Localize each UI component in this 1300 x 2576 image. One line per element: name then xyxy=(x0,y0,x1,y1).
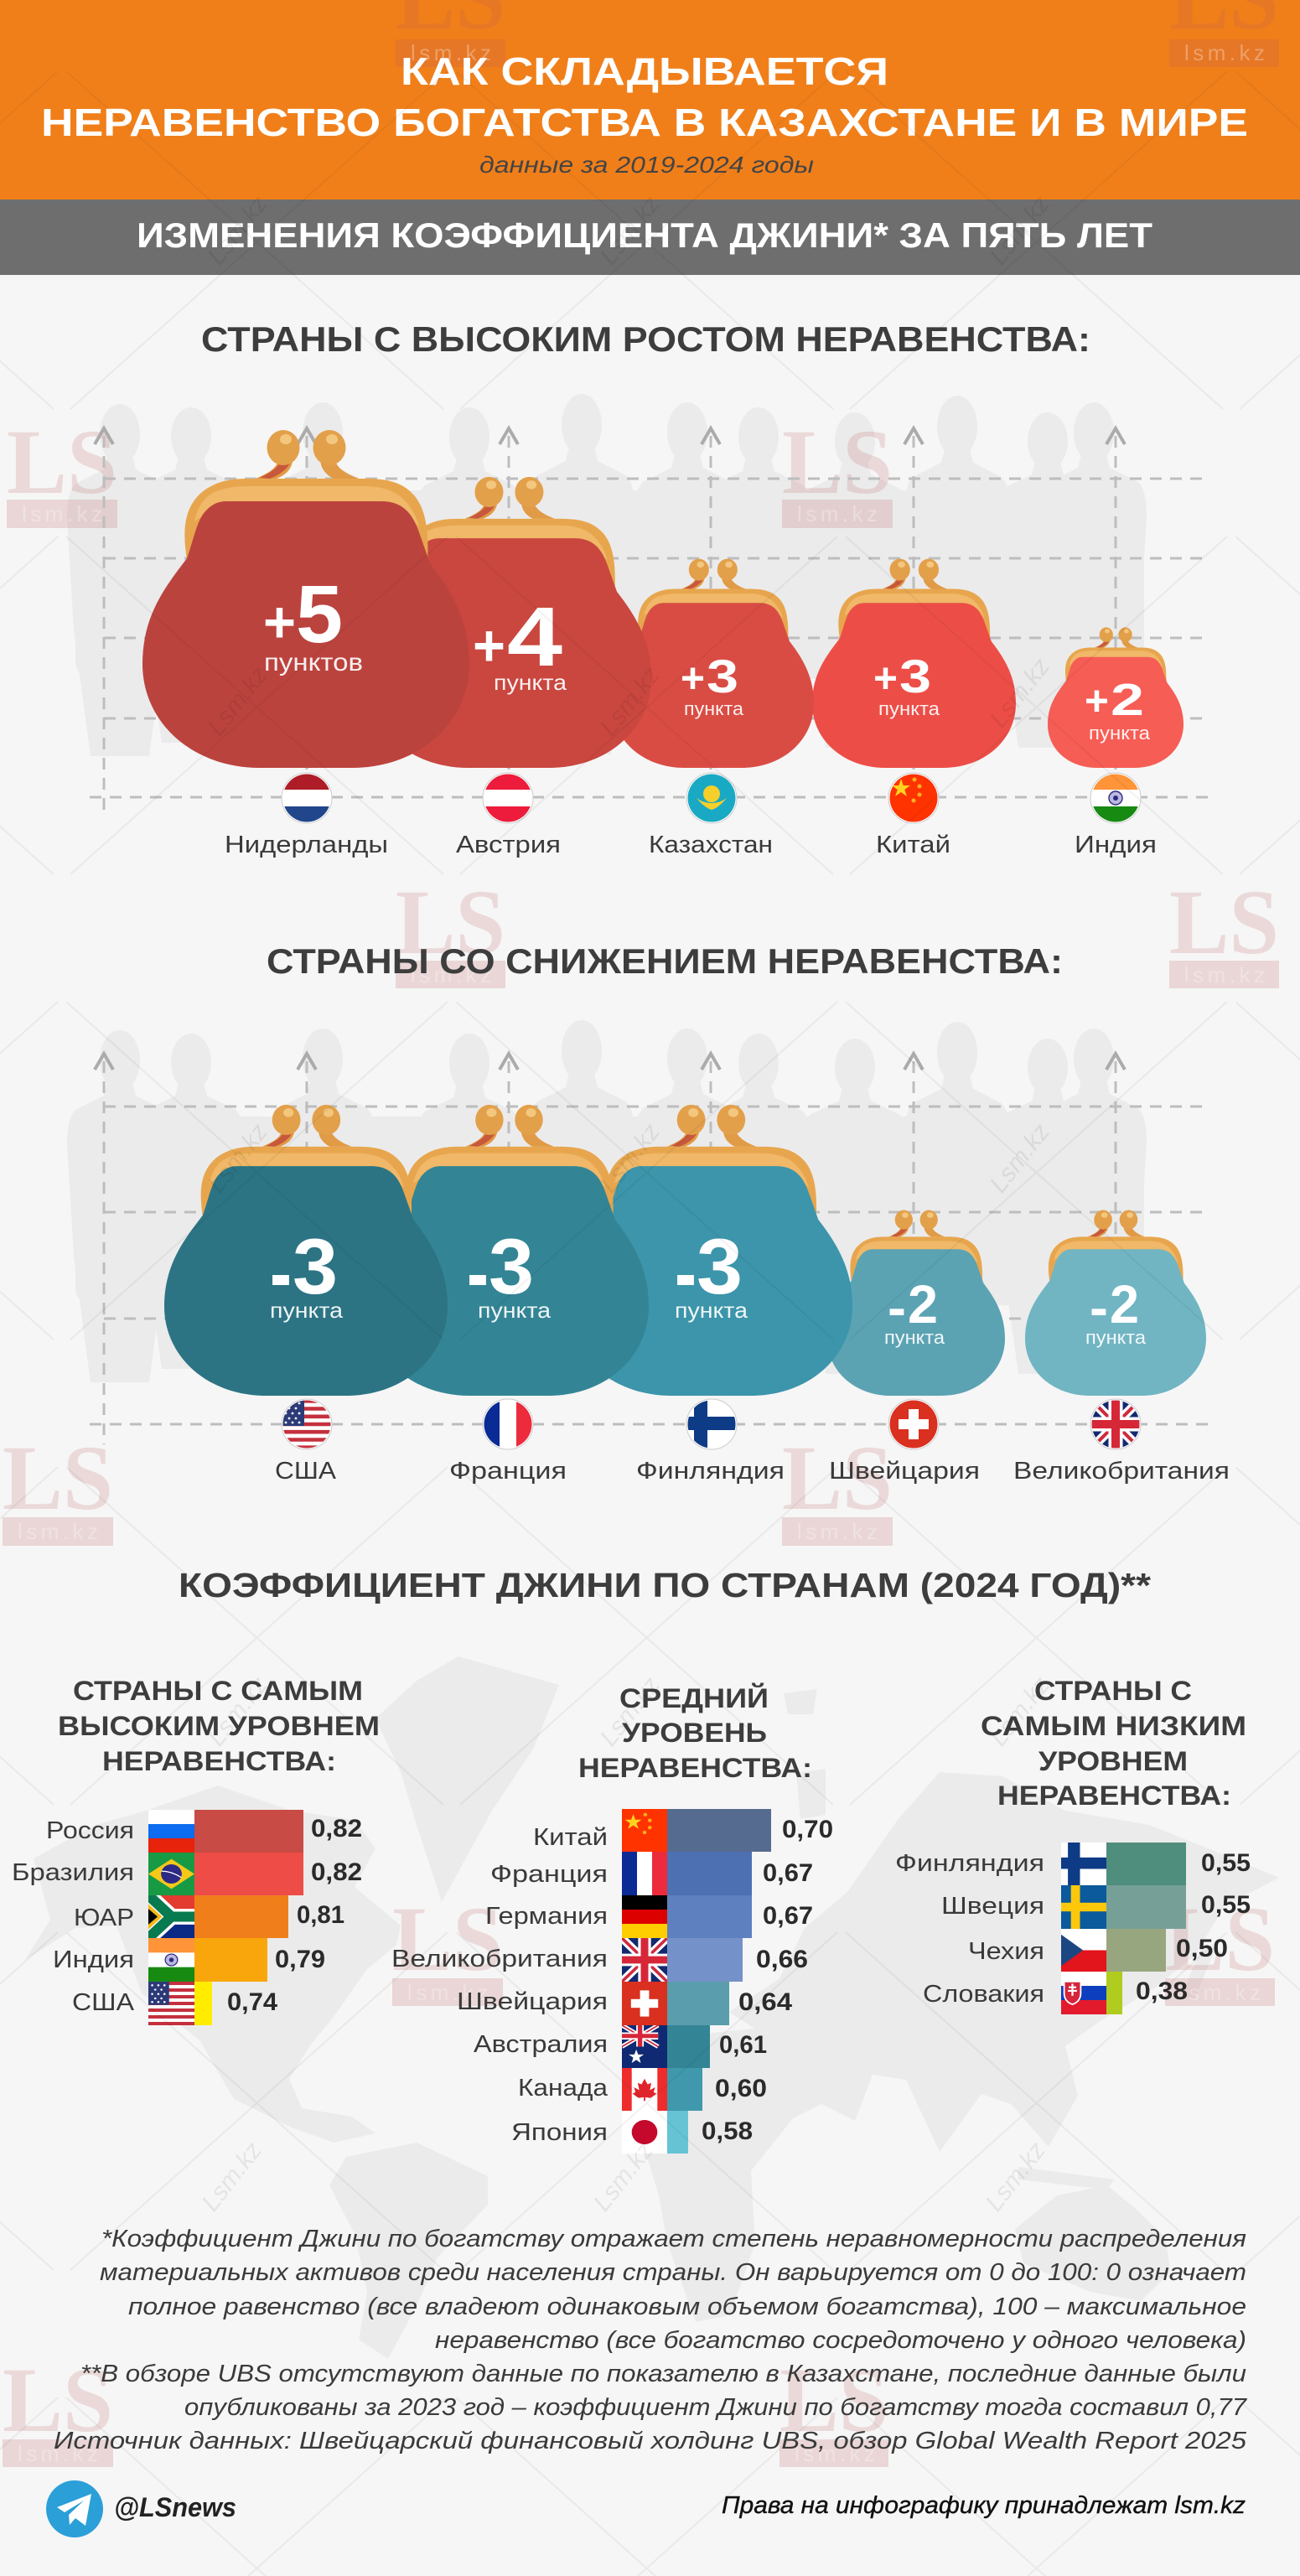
watermarks: LS logos: LS xyxy=(782,411,893,513)
bars: highest xyxy=(194,1810,303,2025)
watermarks: LS logos: LS xyxy=(779,2349,888,2451)
watermarks: LS logos: LS xyxy=(396,871,505,973)
country labels: decline: США xyxy=(275,1458,337,1485)
heading: highest xyxy=(58,1676,380,1776)
watermarks: LS logos: LS xyxy=(782,1427,893,1529)
country labels: decline: Франция xyxy=(449,1458,567,1485)
values: medium xyxy=(702,1816,833,2145)
title: НЕРАВЕНСТВО БОГАТСТВА В КАЗАХСТАНЕ И В МИРЕ xyxy=(41,101,1248,144)
footnotes: *Коэффициент Джини по богатству отражает степень неравномерности распределения xyxy=(101,2226,1246,2252)
country labels: decline: Швейцария xyxy=(829,1458,980,1485)
values: highest: 0,74 xyxy=(227,1988,277,2016)
diagonal watermark text: Lsm.kz xyxy=(981,2137,1051,2216)
watermarks: LS logos: lsm.kz xyxy=(795,2441,875,2466)
diagonal watermark text: Lsm.kz xyxy=(985,1672,1055,1751)
labels: medium: Великобритания xyxy=(391,1946,608,1972)
watermarks: LS logos: LS xyxy=(7,411,117,513)
watermarks: LS logos: lsm.kz xyxy=(1180,1980,1261,2005)
section title: ИЗМЕНЕНИЯ КОЭФФИЦИЕНТА ДЖИНИ* ЗА ПЯТЬ ЛЕТ xyxy=(137,215,1152,255)
flags: highest xyxy=(148,1810,194,2025)
watermarks: LS logos: lsm.kz xyxy=(797,501,878,526)
purse values: high growth: пункта xyxy=(684,698,744,719)
country flags: decline xyxy=(282,1399,1141,1449)
footnotes: Источник данных: Швейцарский финансовый холдинг UBS, обзор Global Wealth Report 2025 xyxy=(54,2428,1247,2454)
watermarks: LS logos: lsm.kz xyxy=(18,1519,98,1544)
heading: lowest: УРОВНЕМ xyxy=(1038,1746,1188,1776)
heading: decline: СТРАНЫ СО СНИЖЕНИЕМ НЕРАВЕНСТВА: xyxy=(267,941,1063,981)
purse values: high growth: 3 xyxy=(899,650,931,702)
watermarks: LS logos: lsm.kz xyxy=(407,1980,488,2005)
heading: medium: УРОВЕНЬ xyxy=(622,1718,767,1748)
purse values: decline: - xyxy=(270,1226,292,1320)
purse values: decline: - xyxy=(1090,1278,1108,1338)
country labels: high growth xyxy=(225,832,1157,858)
purse values: high growth: + xyxy=(681,655,705,702)
values: lowest: 0,55 xyxy=(1201,1849,1251,1877)
purse values: high growth: + xyxy=(473,613,505,678)
panel: highest inequality xyxy=(12,1676,380,2025)
purses: decline xyxy=(164,1105,1206,1396)
values: highest: 0,79 xyxy=(275,1946,325,1973)
heading: lowest: САМЫМ НИЗКИМ xyxy=(981,1711,1246,1741)
diagonal watermark text: Lsm.kz xyxy=(197,2137,267,2216)
values: medium: 0,67 xyxy=(763,1859,813,1887)
purse values: decline: пункта xyxy=(478,1298,552,1323)
diagonal watermark text: Lsm.kz xyxy=(203,661,273,741)
heading: medium xyxy=(578,1683,812,1783)
crowd silhouette: upper section xyxy=(67,394,1147,756)
diagonal watermark text: Lsm.kz xyxy=(203,1672,273,1751)
values: medium: 0,67 xyxy=(763,1902,813,1930)
bars: lowest xyxy=(1106,1843,1186,2014)
country labels: decline: Великобритания xyxy=(1013,1458,1230,1485)
purse values: high growth: пунктов xyxy=(264,649,363,676)
purse values: high growth: + xyxy=(1085,677,1109,724)
diagonal watermark text: Lsm.kz xyxy=(595,1118,666,1198)
copyright: Права на инфографику принадлежат lsm.kz xyxy=(722,2492,1246,2519)
purse values: high growth xyxy=(263,568,1151,744)
heading: highest: СТРАНЫ С САМЫМ xyxy=(73,1676,363,1706)
values: highest xyxy=(227,1815,362,2016)
watermarks: LS logos: lsm.kz xyxy=(18,2441,98,2466)
purse values: high growth: пункта xyxy=(1089,723,1151,744)
values: lowest: 0,38 xyxy=(1136,1977,1188,2005)
purse values: decline: - xyxy=(467,1226,489,1320)
heading: highest: ВЫСОКИМ УРОВНЕМ xyxy=(58,1711,380,1741)
values: medium: 0,60 xyxy=(715,2075,767,2102)
country labels: high growth: Нидерланды xyxy=(225,832,388,858)
flags: medium xyxy=(622,1809,667,2154)
footnotes: материальных активов среди населения страны. Он варьируется от 0 до 100: 0 означает xyxy=(100,2259,1246,2286)
icon: telegram xyxy=(46,2480,103,2537)
watermarks: LS logos: lsm.kz xyxy=(22,501,102,526)
heading: high growth: СТРАНЫ С ВЫСОКИМ РОСТОМ НЕРАВЕНСТВА: xyxy=(201,319,1090,359)
heading: Gini 2024: КОЭФФИЦИЕНТ ДЖИНИ ПО СТРАНАМ (2024 ГОД)** xyxy=(179,1566,1151,1604)
labels: medium: Канада xyxy=(518,2075,609,2102)
country labels: decline xyxy=(275,1458,1230,1485)
diagonal watermark text: Lsm.kz xyxy=(595,661,666,741)
purse values: high growth: 5 xyxy=(296,568,343,660)
country labels: high growth: Индия xyxy=(1075,832,1157,858)
heading: highest: НЕРАВЕНСТВА: xyxy=(102,1746,336,1776)
values: medium: 0,70 xyxy=(782,1816,833,1843)
watermarks: LS logos: lsm.kz xyxy=(411,962,491,987)
values: highest: 0,81 xyxy=(297,1901,344,1929)
watermarks: LS logos: LS xyxy=(1165,1888,1275,1990)
watermarks: LS logos: lsm.kz xyxy=(1184,962,1265,987)
purse values: decline xyxy=(270,1222,1147,1348)
country labels: high growth: Австрия xyxy=(456,832,561,858)
labels: lowest xyxy=(895,1850,1044,2008)
header band: orange xyxy=(0,0,1300,200)
watermarks: LS logos: lsm.kz xyxy=(1184,40,1265,65)
values: lowest: 0,50 xyxy=(1176,1935,1228,1962)
watermarks: LS logos: lsm.kz xyxy=(411,40,491,65)
panel: medium inequality xyxy=(391,1683,833,2154)
country labels: high growth: Китай xyxy=(876,832,950,858)
purse values: high growth: пункта xyxy=(494,670,567,695)
values: medium: 0,61 xyxy=(719,2031,767,2059)
values: lowest xyxy=(1136,1849,1251,2005)
chart grid and arrows: decline xyxy=(90,1054,1209,1444)
values: highest: 0,82 xyxy=(311,1858,362,1886)
labels: lowest: Финляндия xyxy=(895,1850,1044,1877)
purse values: decline: 3 xyxy=(293,1222,338,1310)
values: medium: 0,58 xyxy=(702,2117,753,2145)
diagonal watermark text: Lsm.kz xyxy=(985,1118,1055,1198)
purse values: high growth: + xyxy=(873,655,898,702)
heading: lowest: НЕРАВЕНСТВА: xyxy=(997,1780,1231,1811)
labels: medium: Франция xyxy=(490,1861,608,1888)
footnotes: неравенство (все богатство сосредоточено у одного человека) xyxy=(435,2327,1246,2354)
diagonal watermark text: Lsm.kz xyxy=(203,190,273,270)
purse values: decline: - xyxy=(675,1226,697,1320)
values: highest: 0,82 xyxy=(311,1815,362,1843)
country labels: decline: Финляндия xyxy=(636,1458,785,1485)
watermarks: LS logos: lsm.kz xyxy=(797,1519,878,1544)
purse values: high growth: + xyxy=(263,589,296,655)
labels: highest: ЮАР xyxy=(74,1905,134,1931)
heading: medium: СРЕДНИЙ xyxy=(619,1683,769,1713)
country labels: high growth: Казахстан xyxy=(649,832,773,858)
crowd silhouette: lower section xyxy=(67,1020,1147,1382)
footnotes: опубликованы за 2023 год – коэффициент Джини по богатству тогда составил 0,77 xyxy=(184,2394,1248,2421)
purse values: decline: пункта xyxy=(1085,1327,1147,1348)
diagonal watermark text: Lsm.kz xyxy=(985,190,1055,270)
subtitle: данные за 2019-2024 годы xyxy=(479,152,814,178)
labels: lowest: Швеция xyxy=(941,1893,1044,1920)
purse values: decline: пункта xyxy=(270,1298,344,1323)
footnotes: полное равенство (все владеют одинаковым объемом богатства), 100 – максимальное xyxy=(128,2294,1246,2320)
values: medium: 0,66 xyxy=(756,1946,808,1973)
panel: lowest inequality xyxy=(895,1676,1251,2014)
title: КАК СКЛАДЫВАЕТСЯ xyxy=(401,49,888,93)
purse values: high growth: 2 xyxy=(1111,675,1144,725)
heading: medium: НЕРАВЕНСТВА: xyxy=(578,1753,812,1783)
purse values: decline: 2 xyxy=(1110,1274,1139,1335)
flags: lowest xyxy=(1061,1843,1106,2014)
bars: medium xyxy=(667,1809,771,2154)
title xyxy=(41,49,1248,144)
diagonal watermark text: Lsm.kz xyxy=(203,1118,273,1198)
watermarks: LS logos: LS xyxy=(3,2349,113,2451)
purse values: decline: пункта xyxy=(675,1298,748,1323)
heading: lowest xyxy=(981,1676,1246,1811)
diagonal watermark text xyxy=(197,190,1055,2216)
labels: medium xyxy=(391,1824,609,2146)
labels: medium: Австралия xyxy=(474,2031,608,2058)
purse values: decline: - xyxy=(888,1278,906,1338)
watermarks: LS logos: LS xyxy=(1169,871,1279,973)
purse values: high growth: пункта xyxy=(878,698,940,719)
labels: highest: Бразилия xyxy=(12,1859,134,1886)
labels: medium: Китай xyxy=(533,1824,608,1851)
footnotes xyxy=(54,2226,1248,2454)
labels: highest: США xyxy=(72,1989,135,2016)
values: lowest: 0,55 xyxy=(1201,1891,1251,1919)
diagonal watermark text: Lsm.kz xyxy=(985,653,1055,733)
purse values: decline: 3 xyxy=(697,1222,743,1310)
purse values: high growth: 4 xyxy=(507,590,562,684)
watermarks: LS logos: LS xyxy=(392,1888,503,1990)
purse values: decline: пункта xyxy=(884,1327,945,1348)
world map silhouette xyxy=(25,1656,1279,2359)
purse values: decline: 2 xyxy=(908,1274,938,1335)
labels: highest: Россия xyxy=(46,1817,134,1844)
handle: @LSnews xyxy=(114,2492,236,2522)
diagonal watermark text: Lsm.kz xyxy=(595,190,666,270)
purse values: decline: 3 xyxy=(489,1222,534,1310)
chart grid and arrows: high growth xyxy=(90,428,1209,816)
watermarks: LS logos: LS xyxy=(3,1427,113,1529)
country flags: high growth xyxy=(282,773,1141,823)
labels: highest xyxy=(12,1817,135,2016)
labels: medium: Япония xyxy=(511,2119,608,2146)
labels: highest: Индия xyxy=(53,1946,134,1973)
footnotes: **В обзоре UBS отсутствуют данные по показателю в Казахстане, последние данные были xyxy=(80,2361,1246,2387)
diagonal watermark text: Lsm.kz xyxy=(588,2137,659,2216)
heading: lowest: СТРАНЫ С xyxy=(1034,1676,1192,1706)
labels: medium: Германия xyxy=(485,1903,608,1930)
labels: lowest: Словакия xyxy=(923,1981,1044,2008)
purse values: high growth: 3 xyxy=(707,650,738,702)
values: medium: 0,64 xyxy=(738,1988,792,2016)
labels: medium: Швейцария xyxy=(457,1988,608,2015)
diagonal watermark text: Lsm.kz xyxy=(595,1672,666,1751)
labels: lowest: Чехия xyxy=(968,1938,1044,1965)
section band: gray xyxy=(0,200,1300,275)
purses: high growth xyxy=(142,430,1183,768)
